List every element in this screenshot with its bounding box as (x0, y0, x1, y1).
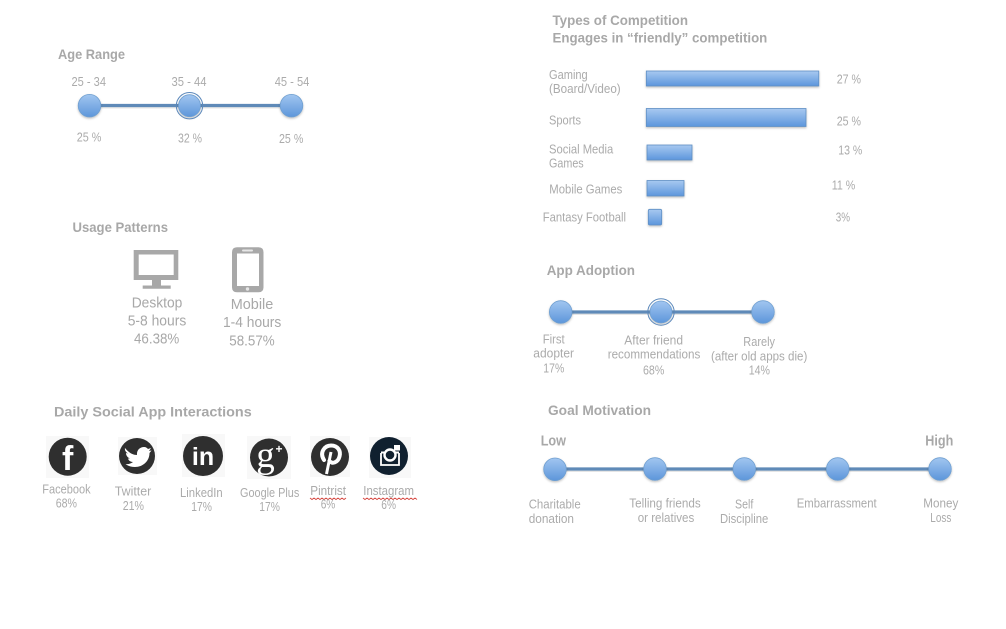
bar: mobile games: Mobile Games (549, 183, 622, 197)
bar: gaming: 27 % (837, 73, 861, 87)
panel: types of competition (543, 12, 862, 225)
icon: desktop monitor (134, 250, 178, 289)
bar: sports (549, 108, 861, 128)
heading: types of competition: Engages in “friendly” competition (552, 30, 767, 46)
item: Google Plus: g (256, 435, 275, 476)
heading: app adoption: App Adoption (547, 262, 635, 278)
timeline: goal motivation (544, 458, 951, 481)
label: rarely: 14% (749, 364, 770, 378)
text: mobile usage: Mobile (231, 297, 273, 313)
label: rarely: (after old apps die) (711, 349, 807, 363)
timeline: age range (78, 92, 303, 119)
label: after friend recommendations (608, 334, 700, 378)
item: Facebook: 68% (56, 496, 77, 510)
item: Google Plus: Google Plus (240, 486, 299, 500)
item: Facebook: Facebook (42, 483, 91, 497)
age percentages: 25 % (77, 131, 101, 145)
label: self discipline: Discipline (720, 512, 768, 526)
text: mobile usage: 1-4 hours (223, 315, 281, 331)
bar: fantasy football: Fantasy Football (543, 211, 626, 225)
label: first adopter: First (543, 333, 565, 347)
heading: types of competition (552, 12, 767, 46)
item: Twitter: 21% (123, 499, 144, 513)
bar: sports: 25 % (837, 114, 861, 128)
label: charitable donation (529, 498, 581, 526)
label: after friend recommendations: After friend (624, 334, 683, 348)
bar: sports: Sports (549, 114, 581, 128)
heading: age range: Age Range (58, 46, 125, 62)
age labels (72, 75, 309, 89)
scale end: high: High (925, 433, 953, 450)
age percentages: 25 % (279, 132, 303, 146)
heading: types of competition: Types of Competition (552, 12, 688, 28)
item: Pinterest: 6% (321, 498, 335, 512)
scale end: low: Low (541, 433, 566, 450)
bar: social media games: Games (549, 157, 584, 171)
bar: social media games: Social Media (549, 143, 613, 157)
age labels: 35 - 44 (172, 75, 207, 89)
label: after friend recommendations: 68% (643, 364, 664, 378)
item: Twitter: Twitter (115, 484, 151, 498)
age percentages: 32 % (178, 132, 202, 146)
label: self discipline: Self (735, 498, 754, 512)
item: Facebook (42, 436, 91, 510)
item: Instagram: 6% (381, 498, 396, 512)
item: Google Plus: + (275, 442, 283, 456)
item: Google Plus: 17% (259, 500, 280, 514)
text: desktop usage: 46.38% (134, 331, 179, 347)
bar: fantasy football: 3% (836, 211, 850, 225)
label: first adopter (533, 333, 574, 376)
bar: gaming: (Board/Video) (549, 82, 621, 96)
panel: age range (58, 46, 309, 146)
bar: gaming (549, 68, 861, 96)
item: LinkedIn (180, 434, 225, 514)
age percentages (77, 131, 303, 146)
heading: usage patterns: Usage Patterns (72, 219, 168, 235)
label: embarrassment: Embarrassment (797, 497, 877, 511)
panel: usage patterns (72, 219, 281, 350)
heading: daily social app interactions: Daily Social App Interactions (54, 404, 252, 420)
item: Instagram: Instagram (363, 484, 414, 498)
label: money loss (923, 497, 959, 525)
label: telling friends or relatives (629, 497, 701, 525)
label: first adopter: 17% (543, 362, 564, 376)
item: LinkedIn: in (192, 443, 214, 471)
label: charitable donation: donation (529, 512, 574, 526)
label: money loss: Loss (930, 511, 951, 525)
panel: goal motivation (529, 402, 959, 526)
item: Facebook: f (62, 440, 74, 478)
label: self discipline (720, 498, 768, 526)
item: Google Plus (240, 435, 299, 514)
item: Twitter (115, 437, 157, 513)
text: mobile usage: 58.57% (229, 334, 275, 350)
label: first adopter: adopter (533, 347, 574, 361)
label: money loss: Money (923, 497, 959, 511)
text: desktop usage: 5-8 hours (128, 314, 186, 330)
timeline: app adoption (549, 299, 774, 325)
heading: goal motivation: Goal Motivation (548, 402, 651, 418)
panel: daily social app interactions (42, 404, 417, 514)
item: Pinterest (310, 436, 350, 512)
label: charitable donation: Charitable (529, 498, 581, 512)
icon: mobile phone (232, 247, 264, 292)
text: desktop usage (128, 296, 186, 347)
item: Pinterest: Pintrist (310, 484, 346, 498)
item: Instagram (363, 437, 417, 512)
age labels: 25 - 34 (72, 75, 106, 89)
bar: social media games: 13 % (838, 144, 862, 158)
bar: gaming: Gaming (549, 68, 588, 82)
bar: social media games (549, 143, 862, 171)
bar: fantasy football (543, 209, 850, 225)
label: rarely: Rarely (743, 335, 776, 349)
age labels: 45 - 54 (275, 75, 309, 89)
panel: app adoption (533, 262, 807, 378)
label: telling friends or relatives: Telling friends (629, 497, 701, 511)
text: desktop usage: Desktop (132, 296, 182, 312)
bar: mobile games: 11 % (832, 179, 855, 193)
bar: mobile games (549, 179, 855, 197)
label: rarely (711, 335, 807, 378)
item: LinkedIn: LinkedIn (180, 486, 223, 500)
label: after friend recommendations: recommendations (608, 348, 700, 362)
item: LinkedIn: 17% (191, 500, 212, 514)
text: mobile usage (223, 297, 281, 350)
label: telling friends or relatives: or relatives (638, 511, 694, 525)
